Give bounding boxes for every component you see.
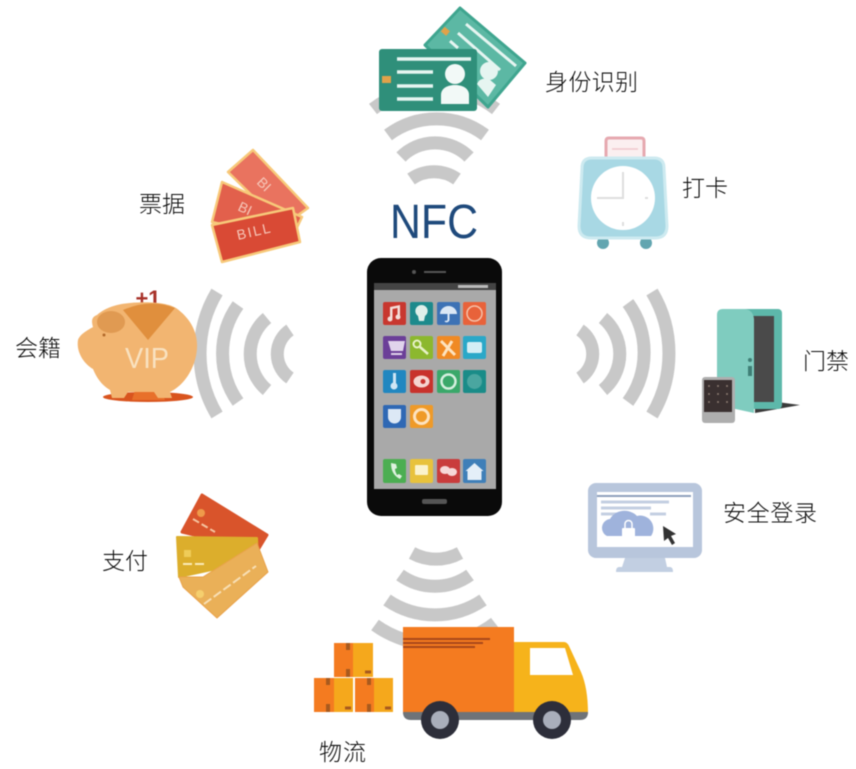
NFC heading: NFC [390,196,478,249]
label: access control: 门禁 [803,348,849,374]
front bill: BILL [235,220,272,243]
label: payment: 支付 [102,548,148,574]
icon: VIP piggy bank: VIP [125,343,169,375]
label: secure login: 安全登录 [723,500,817,526]
signal arcs: top [373,88,496,179]
red card [182,495,267,550]
icon: monitor with cloud lock [588,483,702,572]
icon: back ID card [425,8,525,107]
keypad [702,377,735,423]
icon: bills [212,150,308,262]
label: logistics: 物流 [319,739,366,765]
icon: VIP piggy bank: +1 [135,286,161,311]
signal arcs: right [580,292,669,415]
icon: delivery truck [403,627,588,739]
smartphone [367,258,502,516]
icon: VIP piggy bank [78,286,197,402]
icon: boxes [314,643,393,712]
app icons [383,302,486,483]
orange card [179,543,268,618]
signal arcs: bottom [375,553,495,644]
yellow card [177,537,258,577]
icon: front ID card [379,49,477,111]
back bill: BI [254,174,275,194]
label: identity: 身份识别 [545,69,638,95]
label: clock in: 打卡 [682,175,728,201]
icon: time clock [579,138,667,249]
label: bills: 票据 [139,191,185,217]
signal arcs: left [200,292,290,415]
icon: credit cards [177,495,268,618]
middle bill: BI [236,198,254,218]
label: membership: 会籍 [15,335,61,361]
icon: access door [702,309,800,423]
